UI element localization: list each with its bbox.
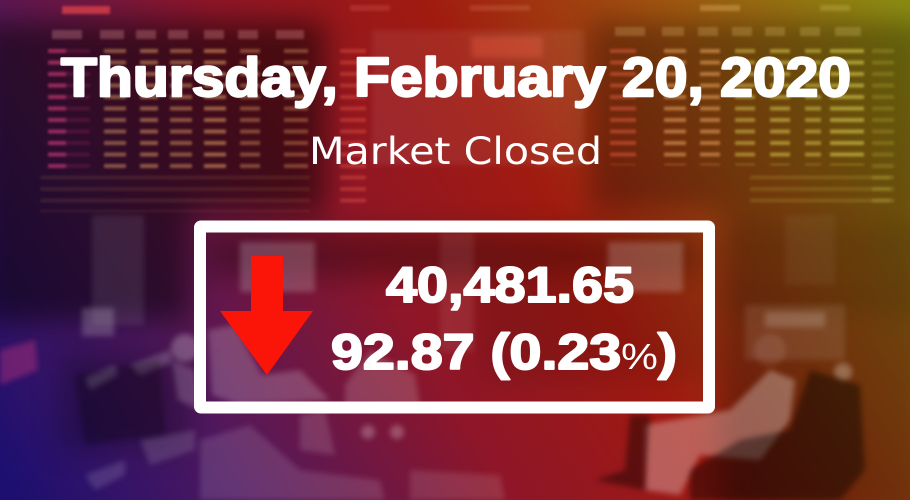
pillars and wall monitors: [82, 215, 845, 360]
title: Thursday, February 20, 2020: [61, 46, 851, 108]
centre screen: [372, 30, 584, 165]
index closing value: 40,481.65: [386, 257, 634, 313]
right ticker board: [350, 5, 894, 208]
chairs and dark figures: [75, 360, 865, 500]
subtitle: Market Closed: [309, 130, 602, 173]
icon: red down arrow: [220, 256, 313, 375]
seated people: [0, 325, 852, 500]
index change value: 92.87 (0.23 %): [331, 324, 677, 380]
left ticker board: [40, 6, 366, 212]
index value frame: [200, 226, 709, 408]
